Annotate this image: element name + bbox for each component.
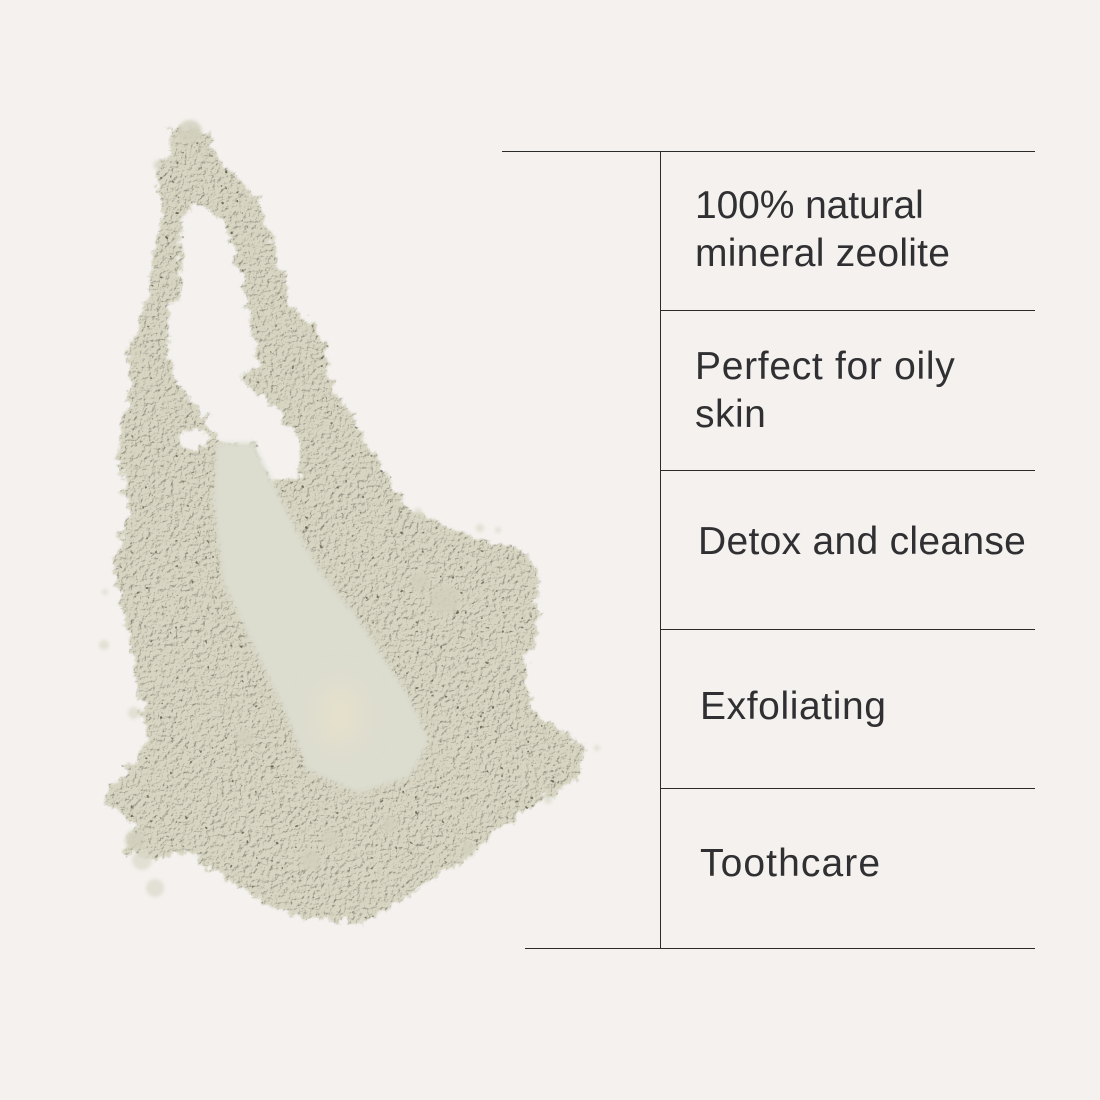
stray crumbs [99,160,600,897]
bottom line [525,948,1035,949]
text: detox and cleanse: Detox and cleanse [698,520,1026,563]
vertical line [660,151,661,948]
text: exfoliating: Exfoliating [700,685,887,728]
text: toothcare: Toothcare [700,842,881,885]
text: natural mineral zeolite [695,184,950,275]
text: oily skin: skin [695,393,766,436]
text: natural mineral zeolite: mineral zeolite [695,232,950,275]
smooth pressed area [213,443,430,793]
lumps in powder [125,120,475,871]
text: oily skin [695,345,955,436]
feature table [502,151,1035,949]
divider lines [661,310,1035,311]
text: oily skin: Perfect for oily [695,345,955,388]
powder mass [100,127,587,923]
text: natural mineral zeolite: 100% natural [695,184,924,227]
top line [502,151,1035,152]
yellow tint in pressed area [316,681,364,749]
